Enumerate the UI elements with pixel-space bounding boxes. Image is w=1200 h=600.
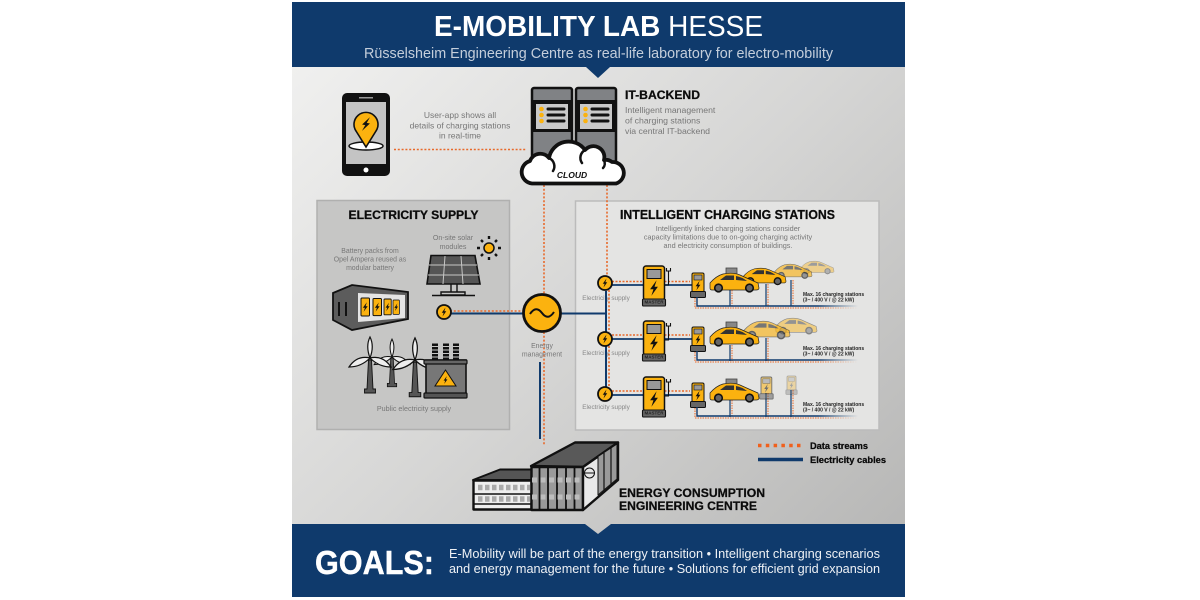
icon: electricity node bbox=[437, 305, 451, 319]
infographic background panel bbox=[292, 2, 905, 597]
icon: smartphone bbox=[342, 93, 390, 176]
icon: wind turbines bbox=[349, 337, 437, 397]
heading: energy consumption engineering centre: ENERGY CONSUMPTION bbox=[619, 486, 765, 500]
legend label: data streams: Data streams bbox=[810, 441, 868, 451]
panel: electricity supply bbox=[317, 200, 510, 430]
legend label: electricity cables: Electricity cables bbox=[810, 455, 886, 465]
heading: intelligent charging stations: INTELLIGENT CHARGING STATIONS bbox=[620, 208, 835, 222]
icon: engineering centre building bbox=[473, 442, 618, 510]
label: station capacity: (3~ / 400 V / @ 22 kW) bbox=[803, 298, 854, 304]
label: station capacity: Max. 16 charging stations bbox=[803, 402, 864, 408]
heading: goals: GOALS: bbox=[315, 544, 434, 581]
icon: solar panel bbox=[427, 256, 480, 296]
label: master: MASTER bbox=[644, 300, 664, 304]
icon: IT servers and cloud bbox=[522, 88, 624, 184]
icon: energy management bbox=[524, 294, 560, 332]
panel: intelligent charging stations bbox=[576, 201, 879, 430]
text: battery packs: modular battery bbox=[346, 265, 394, 272]
text: battery packs: Battery packs from bbox=[341, 248, 399, 255]
title: E-MOBILITY LAB HESSE bbox=[434, 11, 763, 43]
label: master: MASTER bbox=[644, 354, 664, 360]
subtitle: Rüsselsheim Engineering Centre as real-life laboratory for electro-mobility bbox=[364, 46, 834, 62]
label: master: MASTER bbox=[644, 410, 664, 416]
text: solar modules: modules bbox=[440, 243, 467, 251]
text: charging description: Intelligently linked charging stations consider bbox=[656, 224, 801, 233]
text: battery packs: Opel Ampera reused as bbox=[334, 256, 407, 264]
icon: modular battery bbox=[333, 285, 408, 330]
heading: IT-backend: IT-BACKEND bbox=[625, 90, 700, 102]
icon: transformer bbox=[424, 343, 467, 398]
label: electricity supply: Electricity supply bbox=[582, 350, 631, 357]
charging row 1 bbox=[582, 261, 864, 308]
text: IT-backend description: via central IT-backend bbox=[625, 126, 710, 136]
heading: electricity supply: ELECTRICITY SUPPLY bbox=[348, 208, 478, 222]
icon: sun bbox=[477, 236, 501, 260]
text: IT-backend description: Intelligent management bbox=[625, 105, 716, 115]
text: goals list: E-Mobility will be part of the energy transition • Intelligent charging scenarios bbox=[449, 547, 880, 561]
text: user-app: in real-time bbox=[439, 130, 481, 140]
text: user-app: User-app shows all bbox=[424, 110, 496, 120]
label: station capacity: (3~ / 400 V / @ 22 kW) bbox=[803, 408, 854, 414]
header banner bbox=[292, 2, 905, 78]
label: electricity supply: Electricity supply bbox=[582, 295, 631, 302]
text: charging description: and electricity consumption of buildings. bbox=[664, 241, 792, 250]
electricity supply nodes bbox=[598, 276, 612, 401]
text: IT-backend description: of charging stations bbox=[625, 116, 701, 126]
label: station capacity: Max. 16 charging stations bbox=[803, 292, 864, 298]
text: energy management: management bbox=[522, 352, 562, 358]
label: cloud: CLOUD bbox=[557, 170, 587, 180]
text: charging description: capacity limitations due to on-going charging activity bbox=[644, 232, 813, 242]
text: public electricity supply: Public electricity supply bbox=[377, 404, 452, 413]
text: goals list: and energy management for the future • Solutions for efficient grid expansion bbox=[449, 562, 880, 576]
label: electricity supply: Electricity supply bbox=[582, 404, 631, 411]
label: station capacity: Max. 16 charging stations bbox=[803, 346, 864, 352]
text: solar modules: On-site solar bbox=[433, 234, 474, 242]
connection lines bbox=[394, 150, 609, 445]
legend bbox=[758, 441, 886, 465]
charging row 2 bbox=[582, 318, 864, 362]
heading: energy consumption engineering centre: ENGINEERING CENTRE bbox=[619, 499, 757, 513]
charging row 3 bbox=[582, 376, 864, 418]
text: energy management: Energy bbox=[531, 343, 553, 350]
text: user-app: details of charging stations bbox=[410, 120, 510, 130]
goals banner bbox=[292, 524, 905, 597]
label: station capacity: (3~ / 400 V / @ 22 kW) bbox=[803, 352, 854, 358]
